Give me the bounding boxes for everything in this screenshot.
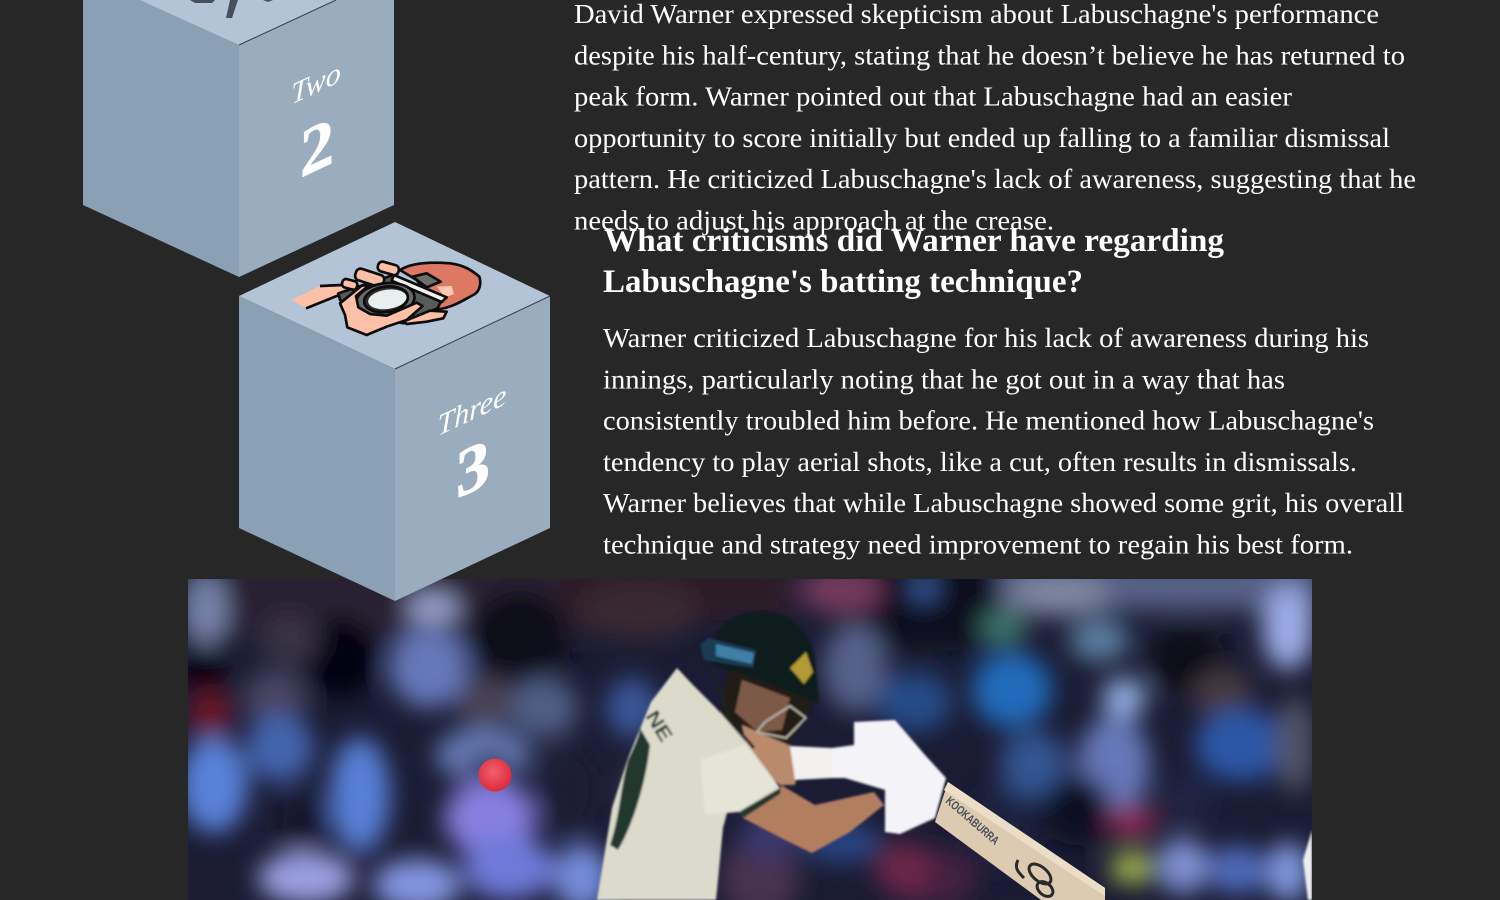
text block: Warner's criticism [603,323,1404,560]
text block: Warner's criticism: Warner criticized Labuschagne for his lack of awareness during his [603,323,1369,353]
bat: KOOKABURRA [943,794,1002,848]
text block: Warner's criticism: consistently troubled him before. He mentioned how Labuschagne's [603,406,1374,436]
text block: Warner's skepticism: despite his half-century, stating that he doesn’t believe he has returned to [574,40,1405,70]
text block: Warner's skepticism: needs to adjust his approach at the crease. [574,206,1054,236]
photo: batsman playing a shot in front of a blurred crowd [170,560,1320,900]
batsman: NE [641,707,676,746]
icon: hands holding a camera [292,261,480,335]
bat [935,782,1105,900]
cube three [239,222,550,601]
text block: Warner's skepticism: peak form. Warner pointed out that Labuschagne had an easier [574,82,1292,112]
cube two [83,0,394,277]
icon fragment on cube two [190,0,273,18]
text block: Warner's criticism: Warner believes that while Labuschagne showed some grit, his overall [603,488,1404,518]
heading: batting technique question: What criticisms did Warner have regarding [604,223,1225,259]
text block: Warner's criticism: innings, particularly noting that he got out in a way that has [603,364,1285,394]
text block: Warner's skepticism: pattern. He criticized Labuschagne's lack of awareness, suggesting that he [574,164,1416,194]
heading: batting technique question: Labuschagne's batting technique? [603,264,1083,300]
text block: Warner's skepticism [574,0,1416,236]
text block: Warner's criticism: tendency to play aerial shots, like a cut, often results in dismissals. [603,447,1357,477]
label: Three: Three [438,377,506,443]
heading: batting technique question [603,223,1225,300]
batsman [597,612,1312,900]
text block: Warner's criticism: technique and strategy need improvement to regain his best form. [603,530,1353,560]
number 3: 3 [456,423,490,514]
label: Two: Two [291,55,341,111]
number 2: 2 [300,102,334,193]
cricket ball [478,758,512,792]
text block: Warner's skepticism: opportunity to score initially but ended up falling to a familiar dismissal [574,123,1390,153]
